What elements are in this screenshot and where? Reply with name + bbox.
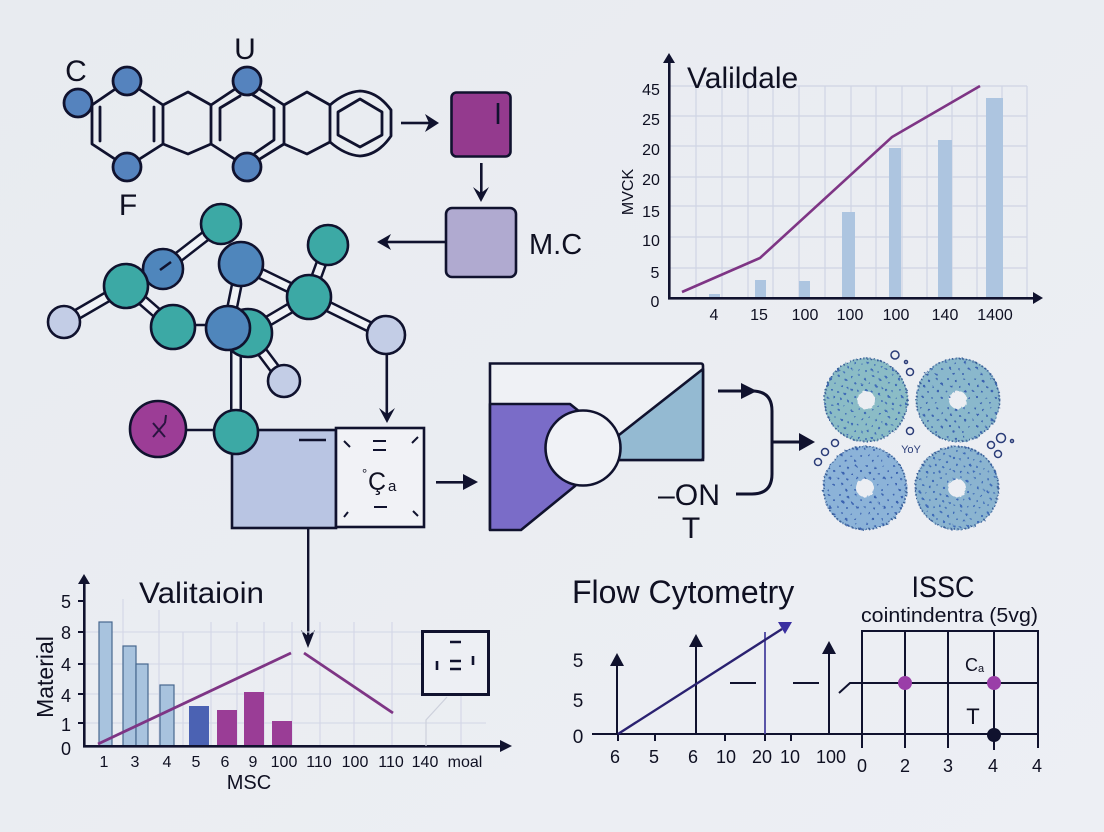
- small particles: [814, 351, 1014, 466]
- purple vertical marker: [764, 632, 766, 734]
- diagonal arrow: [618, 622, 792, 734]
- arrow: lavender box to molecule: [377, 234, 446, 250]
- x axis labels: 140: [412, 754, 438, 771]
- chart title: Flow Cytometry: [572, 574, 794, 610]
- x axis labels: 6: [610, 747, 620, 767]
- arrow: assay box down to validation chart: [301, 528, 315, 648]
- arrow: molecule to purple box: [401, 114, 439, 132]
- arrow: assay box to instrument: [436, 474, 478, 490]
- panel: assay box: [232, 428, 424, 528]
- x axis labels: [610, 747, 846, 767]
- icon: teal node: [214, 410, 258, 454]
- y axis labels: 5: [573, 651, 583, 672]
- x axis labels: moal: [448, 754, 482, 771]
- y axis labels: 5: [573, 691, 583, 712]
- chart subtitle: cointindentra (5vg): [861, 605, 1038, 627]
- x axis labels: 4: [1032, 756, 1042, 776]
- double bonds: [64, 224, 386, 432]
- x axis labels: 100: [342, 754, 368, 771]
- y axis labels: 5: [651, 265, 660, 282]
- x axis labels: 110: [378, 754, 404, 771]
- x axis labels: 100: [271, 754, 297, 771]
- label M.C: M.C: [529, 229, 582, 261]
- label: ON T: [658, 479, 720, 545]
- x axis labels: 15: [750, 307, 768, 324]
- chart: ISSC grid: [857, 571, 1042, 776]
- cell top left: [824, 358, 908, 442]
- y axis labels: 4: [61, 655, 71, 675]
- x axis labels: 6: [688, 747, 698, 767]
- atom label F: F: [119, 189, 137, 222]
- y axis labels: 0: [573, 727, 583, 748]
- x axis labels: 4: [163, 754, 172, 771]
- y axis labels: 20: [642, 142, 660, 159]
- icon: purple box: [452, 92, 510, 156]
- y axis labels: 5: [61, 592, 71, 612]
- labels in grid: a: [978, 663, 985, 675]
- cell top right: [916, 358, 1000, 442]
- light bars: [99, 622, 174, 746]
- assay right cell: [336, 428, 424, 527]
- x axis labels: 5: [192, 754, 201, 771]
- arrow: purple box to lavender box: [473, 163, 489, 202]
- data points: [898, 676, 1001, 742]
- bars: [709, 98, 1003, 297]
- trend line right: [304, 653, 393, 713]
- chart title: Valitaioin: [139, 577, 264, 610]
- x axis labels: 140: [932, 307, 958, 324]
- atom label C: C: [65, 55, 87, 88]
- x axis labels: 3: [943, 756, 953, 776]
- labels in grid: T: [966, 704, 980, 729]
- x axis labels: 6: [221, 754, 230, 771]
- labels in grid: [965, 655, 985, 729]
- y axis labels: 4: [61, 686, 71, 706]
- callout: small legend box: [422, 632, 488, 746]
- small particles: YoY: [901, 444, 922, 456]
- chart: Flow Cytometry: [572, 574, 862, 767]
- y axis labels: 45: [642, 82, 660, 99]
- dashes: [730, 683, 862, 693]
- x axis labels: 10: [780, 747, 800, 767]
- x axis labels: 1: [100, 754, 109, 771]
- icon: purple X node: [130, 401, 186, 457]
- label: ON T: T: [682, 512, 700, 545]
- grid lines: [862, 631, 1038, 750]
- panel: cell images: [814, 351, 1014, 530]
- x axis labels: 4: [988, 756, 998, 776]
- x axis labels: 10: [716, 747, 736, 767]
- x axis labels: 100: [837, 307, 863, 324]
- x axis labels: 4: [710, 307, 719, 324]
- assay left cell: [232, 430, 336, 528]
- chart title: Valildale: [687, 62, 798, 95]
- instrument housing: [490, 364, 703, 530]
- x axis labels: 100: [792, 307, 818, 324]
- x axis labels: 2: [900, 756, 910, 776]
- up arrows: [610, 634, 836, 734]
- single bonds: [158, 325, 236, 430]
- arrow: bracket to cell images: [718, 383, 815, 494]
- x axis labels: 0: [857, 756, 867, 776]
- x axis labels: 110: [306, 754, 332, 771]
- chart: Validation bars and line: [32, 574, 512, 794]
- trend line left: [98, 653, 291, 744]
- y axis labels: 10: [642, 233, 660, 250]
- y axis labels: [61, 592, 71, 759]
- chart title: ISSC: [912, 571, 974, 604]
- icon: lavender box: [446, 208, 516, 277]
- purple bars: [217, 692, 292, 746]
- panel: top molecule structure: [64, 33, 391, 222]
- teal wedge: [610, 369, 703, 460]
- x axis labels: 100: [816, 747, 846, 767]
- arrow: molecule to assay box: [379, 354, 395, 423]
- baseline axis: [592, 734, 862, 741]
- assay right cell: a: [388, 478, 397, 495]
- x axis labels: [710, 307, 1013, 324]
- white circle: [546, 410, 620, 486]
- panel: instrument diagram: [490, 364, 703, 530]
- blue bar: [189, 706, 209, 746]
- molecule bonds: [78, 81, 391, 167]
- cell bottom right: [916, 446, 998, 530]
- purple wedge: [490, 404, 590, 530]
- axes: [663, 53, 1043, 304]
- x axis labels: [100, 754, 482, 771]
- atoms: [48, 204, 405, 397]
- x axis labels: 9: [249, 754, 258, 771]
- y axis labels: 0: [61, 739, 71, 759]
- x axis labels: 20: [752, 747, 772, 767]
- assay right cell: Ç: [368, 468, 386, 496]
- x axis labels: 1400: [977, 307, 1013, 324]
- chart: Validale line and bar chart: [620, 53, 1043, 324]
- panel: branched molecule: [48, 204, 405, 432]
- y axis title: Material: [32, 636, 58, 718]
- label: ON T: –ON: [658, 479, 720, 512]
- y axis labels: 15: [642, 204, 660, 221]
- y axis labels: [642, 82, 660, 311]
- cell bottom left: [824, 446, 906, 530]
- axes: [78, 574, 512, 752]
- atom label U: U: [234, 33, 256, 66]
- y axis labels: 20: [642, 172, 660, 189]
- x axis labels: 5: [649, 747, 659, 767]
- grid: [84, 599, 486, 746]
- x axis labels: 3: [131, 754, 140, 771]
- y axis labels: 25: [642, 112, 660, 129]
- y axis labels: [573, 651, 583, 748]
- assay right cell: °: [362, 466, 367, 481]
- x axis title: MSC: [227, 772, 271, 794]
- molecule atoms: [64, 67, 261, 181]
- labels in grid: C: [965, 655, 978, 675]
- y axis labels: 1: [61, 715, 71, 735]
- grid: [669, 86, 1027, 298]
- x axis labels: [857, 756, 1042, 776]
- y axis title: MVCK: [620, 169, 637, 215]
- x axis labels: 100: [883, 307, 909, 324]
- y axis labels: 0: [651, 294, 660, 311]
- trend line: [682, 86, 980, 292]
- y axis labels: 8: [61, 623, 71, 643]
